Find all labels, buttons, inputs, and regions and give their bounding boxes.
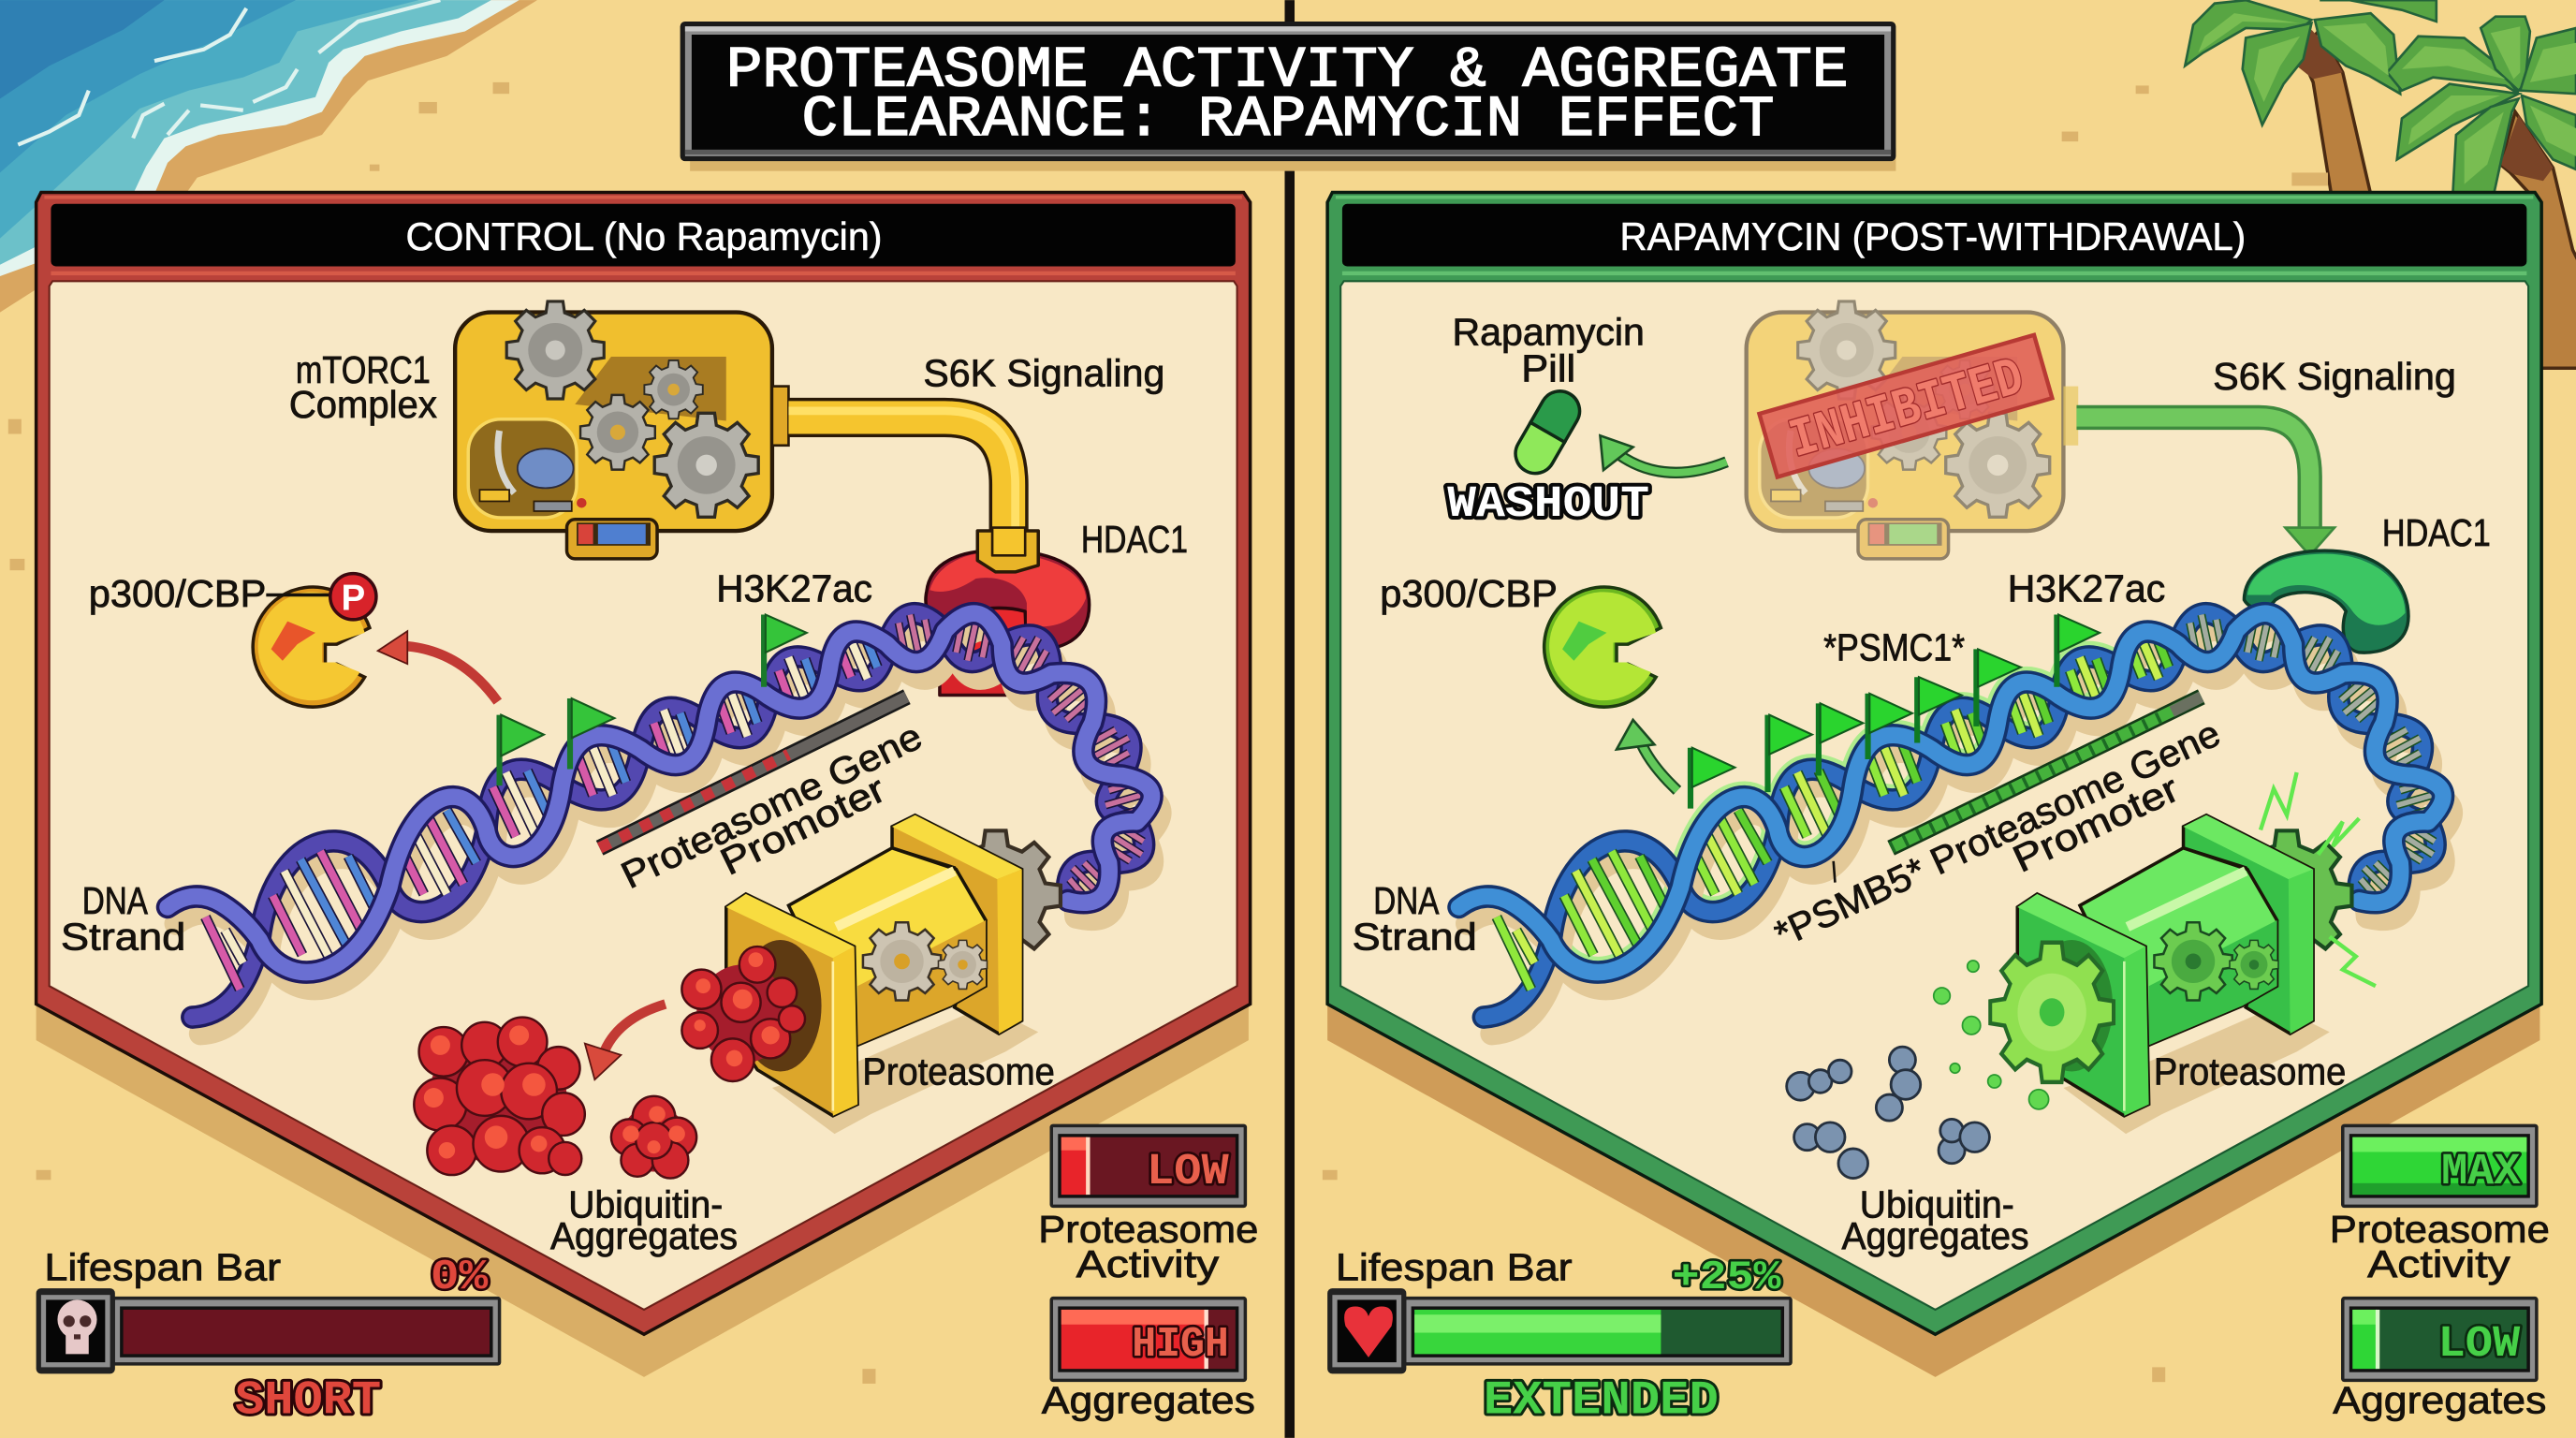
washout label: WASHOUT	[1447, 480, 1649, 530]
label: mTORC1 complex: mTORC1	[296, 348, 431, 391]
label: aggregates: Aggregates	[2333, 1379, 2546, 1422]
label: rapamycin pill: Pill	[1521, 346, 1575, 389]
panel header	[1342, 204, 2526, 266]
label: p300/CBP: p300/CBP	[89, 572, 266, 615]
DNA strand, green activated	[1459, 613, 2452, 1034]
label: proteasome activity: Proteasome	[1038, 1208, 1258, 1251]
ubiquitin aggregate: large	[414, 1018, 585, 1175]
panel: rapamycin	[1327, 192, 2550, 1429]
H3K27ac flags, many	[1690, 615, 2100, 809]
HDAC1 enzyme, released	[2244, 550, 2408, 653]
status meter: aggregates high: HIGH	[1132, 1320, 1229, 1369]
label: H3K27ac: H3K27ac	[2008, 567, 2165, 610]
label: proteasome: Proteasome	[862, 1050, 1055, 1093]
label: PSMB5 proteasome gene promoter: Promoter	[2006, 767, 2185, 881]
label: proteasome activity: Activity	[1076, 1242, 1220, 1285]
label: DNA strand: Strand	[1352, 916, 1477, 959]
proteasome	[726, 815, 1061, 1134]
status meter: aggregates low: LOW	[2438, 1320, 2521, 1370]
title banner: PROTEASOME ACTIVITY & AGGREGATE	[726, 38, 1848, 103]
proteasome, active green	[2017, 815, 2351, 1134]
HDAC1 enzyme	[926, 528, 1090, 696]
ubiquitin aggregate: small	[611, 1096, 696, 1179]
lifespan bar label: Lifespan Bar	[44, 1245, 281, 1288]
front spinning gear	[1990, 943, 2114, 1082]
H3K27ac flags	[500, 615, 807, 785]
status meter: proteasome activity max	[2341, 1124, 2539, 1208]
label: DNA strand: DNA	[1373, 879, 1440, 922]
promoter bar	[600, 697, 907, 848]
p300/CBP pacman active	[1544, 587, 1661, 707]
label: ubiquitin aggregates	[550, 1183, 738, 1257]
center divider	[1284, 0, 1295, 1438]
panel shadow	[1327, 230, 2539, 1377]
label: HDAC1: HDAC1	[1081, 518, 1188, 561]
arrow: washout	[1600, 435, 1727, 473]
arrow: acetylation to p300	[378, 631, 498, 702]
label: proteasome activity	[1038, 1208, 1258, 1285]
mTORC1 complex	[455, 301, 772, 559]
label: PSMC1: *PSMC1*	[1823, 626, 1965, 669]
panel header	[51, 204, 1236, 266]
label: ubiquitin aggregates: Ubiquitin-	[568, 1183, 723, 1226]
label: HDAC1: HDAC1	[2382, 511, 2491, 554]
label: ubiquitin aggregates: Aggregates	[550, 1214, 738, 1257]
label: S6K signaling: S6K Signaling	[923, 352, 1164, 395]
label: proteasome activity	[2330, 1208, 2550, 1285]
p300/CBP pacman with phosphate: P	[341, 578, 365, 618]
status meter: proteasome activity max: MAX	[2441, 1148, 2521, 1197]
label: ubiquitin aggregates	[1841, 1183, 2029, 1257]
label: rapamycin pill: Rapamycin	[1453, 311, 1645, 354]
icon: skull	[57, 1299, 97, 1354]
ocean and shoreline	[0, 0, 537, 313]
H3K27ac label: H3K27ac	[716, 567, 872, 610]
frame highlight strips	[44, 196, 1242, 275]
label: DNA strand	[61, 879, 185, 959]
label: DNA strand: Strand	[61, 916, 185, 959]
aggregate leaving proteasome	[681, 946, 805, 1081]
arrow: p300 recruitment	[1617, 720, 1677, 790]
lifespan bar	[1327, 1288, 1793, 1373]
label: mTORC1 complex	[289, 348, 437, 426]
icon: heart	[1344, 1306, 1393, 1357]
icon: rapamycin pill	[1508, 384, 1587, 480]
label: S6K signaling: S6K Signaling	[2213, 355, 2456, 398]
label: DNA strand	[1352, 879, 1477, 959]
label: PSMB5 proteasome gene promoter: *PSMB5* Proteasome Gene	[1767, 712, 2227, 956]
lifespan bar	[37, 1288, 501, 1373]
status meter: proteasome activity low: LOW	[1147, 1148, 1229, 1197]
label: proteasome gene promoter: Proteasome Gene	[614, 714, 929, 897]
panel body	[1340, 281, 2528, 1310]
p300/CBP pacman with phosphate	[253, 574, 376, 707]
degraded fragments sparkles	[1934, 961, 2049, 1109]
lifespan status: short: SHORT	[235, 1375, 381, 1429]
S6K signaling pipe	[772, 387, 1016, 546]
label: DNA strand: DNA	[82, 879, 148, 922]
label: proteasome: Proteasome	[2154, 1050, 2346, 1093]
lifespan value: +25%	[1673, 1255, 1781, 1301]
arrow: aggregates out	[585, 1005, 666, 1079]
panel frame	[1327, 192, 2541, 1334]
status meter: aggregates high	[1050, 1297, 1247, 1382]
lifespan bar label: Lifespan Bar	[1336, 1245, 1573, 1288]
label: rapamycin pill	[1453, 311, 1645, 389]
frame highlight strips	[1336, 196, 2533, 275]
panel header: CONTROL (No Rapamycin)	[406, 214, 882, 258]
status meter: aggregates low	[2341, 1297, 2539, 1382]
label: proteasome activity: Activity	[2367, 1242, 2511, 1285]
panel shadow	[37, 230, 1249, 1377]
panel body	[50, 281, 1237, 1310]
panel: control	[37, 192, 1258, 1429]
title banner: CLEARANCE: RAPAMYCIN EFFECT	[801, 88, 1775, 153]
inhibited stamp: INHIBITED	[1783, 348, 2030, 473]
DNA strand	[168, 613, 1160, 1034]
DNA glow	[1551, 656, 2121, 973]
label: mTORC1 complex: Complex	[289, 383, 437, 426]
label: aggregates: Aggregates	[1042, 1379, 1255, 1422]
faded mTORC1 complex	[1747, 301, 2063, 559]
status meter: proteasome activity low	[1050, 1124, 1247, 1208]
label: proteasome activity: Proteasome	[2330, 1208, 2550, 1251]
title shadow	[690, 148, 1895, 171]
title banner	[681, 22, 1895, 161]
promoter bar, active	[1891, 697, 2202, 848]
label: proteasome gene promoter: Promoter	[713, 767, 892, 884]
lifespan status: extended: EXTENDED	[1484, 1375, 1719, 1429]
label: ubiquitin aggregates: Ubiquitin-	[1860, 1183, 2014, 1226]
cleared aggregate fragments	[1787, 1047, 1989, 1179]
panel header: RAPAMYCIN (POST-WITHDRAWAL)	[1620, 214, 2246, 258]
palm trees	[2185, 0, 2576, 368]
label: p300/CBP: p300/CBP	[1380, 572, 1558, 615]
S6K signaling arrow	[2063, 387, 2334, 555]
panel frame	[37, 192, 1251, 1334]
label: ubiquitin aggregates: Aggregates	[1841, 1214, 2029, 1257]
energy sparks	[2261, 772, 2376, 986]
lifespan value: 0%	[431, 1253, 489, 1301]
